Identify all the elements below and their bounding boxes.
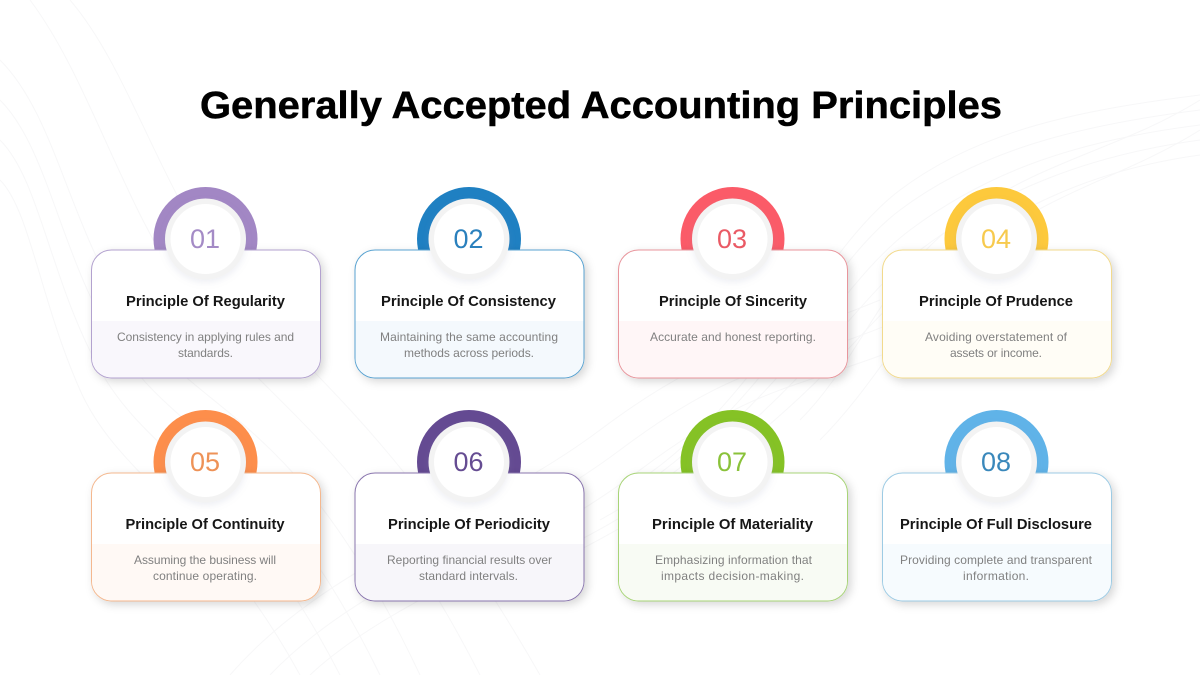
band 07 (619, 544, 847, 600)
description 04 (925, 330, 1068, 360)
number disc 06 (428, 422, 510, 502)
card 01: Principle Of Regularity (92, 187, 320, 378)
number disc 04 (956, 198, 1037, 280)
card 03: Principle Of Sincerity (618, 187, 848, 378)
card panel 05 (92, 473, 320, 601)
card panel 02 (355, 250, 584, 378)
number disc 01 (165, 198, 246, 280)
heading 01: Principle Of Regularity (126, 293, 286, 310)
card panel 07 (618, 473, 848, 601)
description 03: Accurate and honest reporting. (650, 330, 816, 344)
title: Generally Accepted Accounting Principles (200, 85, 1002, 127)
band 08 (883, 544, 1111, 600)
description 07: impacts decision-making. (661, 569, 804, 583)
ring 06 (417, 410, 521, 514)
ring 01 (154, 187, 258, 291)
description 06: Reporting financial results over (387, 553, 552, 567)
number disc 05 (165, 422, 246, 502)
card 07: Principle Of Materiality (618, 410, 848, 601)
band 06 (356, 544, 584, 600)
description 04: Avoiding overstatement of (925, 330, 1068, 344)
description 01: Consistency in applying rules and (117, 330, 294, 344)
description 06: standard intervals. (419, 569, 518, 583)
description 04: assets or income. (950, 346, 1042, 360)
band 02 (356, 321, 584, 378)
number 08: 08 (981, 447, 1011, 477)
heading 04: Principle Of Prudence (919, 293, 1073, 310)
heading 03: Principle Of Sincerity (659, 293, 808, 310)
card 02: Principle Of Consistency (355, 187, 584, 378)
card 04: Principle Of Prudence (882, 187, 1112, 378)
description 01: standards. (178, 346, 233, 360)
number 03: 03 (717, 224, 747, 254)
heading 07: Principle Of Materiality (652, 516, 814, 533)
number 02: 02 (453, 224, 484, 254)
card panel 01 (92, 250, 320, 378)
description 02: Maintaining the same accounting (380, 330, 558, 344)
number 05: 05 (190, 447, 220, 477)
ring 08 (944, 410, 1048, 514)
ring 05 (154, 410, 258, 514)
number disc 03 (692, 198, 773, 280)
number 06: 06 (453, 447, 484, 477)
card panel 06 (355, 473, 584, 601)
band 01 (92, 321, 320, 378)
card 05: Principle Of Continuity (92, 410, 320, 601)
number 04: 04 (981, 224, 1011, 254)
band 03 (619, 321, 847, 378)
description 01 (117, 330, 294, 360)
description 02 (380, 330, 558, 360)
number disc 07 (692, 422, 773, 502)
card 06: Principle Of Periodicity (355, 410, 584, 601)
band 05 (92, 544, 320, 600)
heading 05: Principle Of Continuity (126, 516, 285, 533)
ring 03 (680, 187, 784, 291)
description 07: Emphasizing information that (655, 553, 813, 567)
band 04 (883, 321, 1111, 378)
description 05: continue operating. (153, 569, 257, 583)
number disc 02 (428, 198, 510, 280)
ring 07 (680, 410, 784, 514)
description 08 (900, 553, 1093, 583)
card panel 04 (882, 250, 1112, 378)
description 02: methods across periods. (404, 346, 534, 360)
description 05: Assuming the business will (134, 553, 276, 567)
card 08: Principle Of Full Disclosure (882, 410, 1112, 601)
description 05 (134, 553, 276, 583)
heading 08: Principle Of Full Disclosure (900, 516, 1092, 533)
description 08: information. (963, 569, 1029, 583)
ring 04 (944, 187, 1048, 291)
number 01: 01 (190, 224, 220, 254)
card panel 08 (882, 473, 1112, 601)
number disc 08 (956, 422, 1037, 502)
heading 02: Principle Of Consistency (381, 293, 557, 310)
number 07: 07 (717, 447, 747, 477)
card panel 03 (618, 250, 848, 378)
heading 06: Principle Of Periodicity (388, 516, 551, 533)
description 07 (655, 553, 813, 583)
description 06 (387, 553, 552, 583)
description 08: Providing complete and transparent (900, 553, 1093, 567)
ring 02 (417, 187, 521, 291)
